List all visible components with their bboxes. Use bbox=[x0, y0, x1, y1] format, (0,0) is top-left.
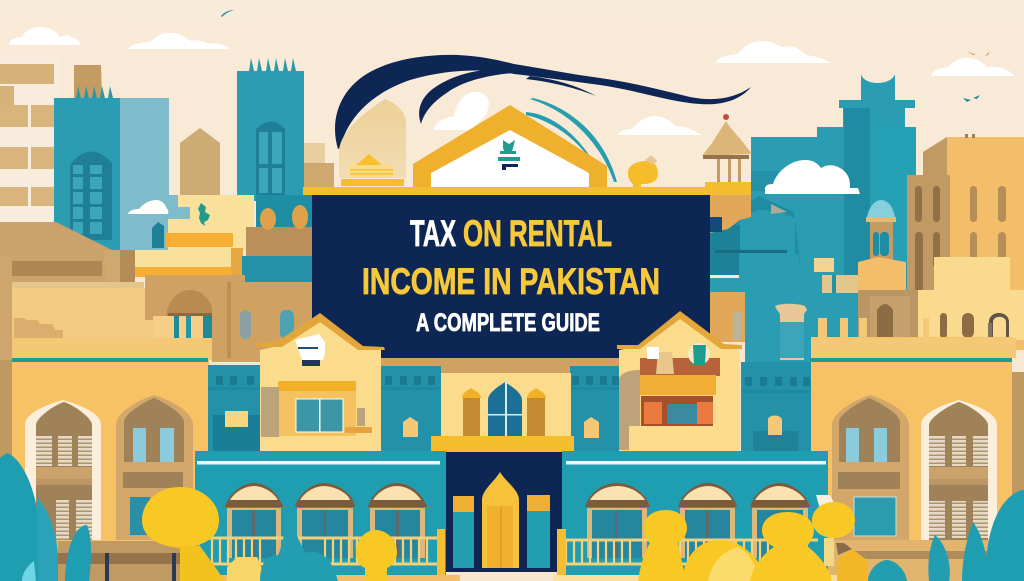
right teal skyline bbox=[710, 74, 916, 338]
gold cornice bbox=[303, 187, 720, 195]
center yellow tree bbox=[356, 530, 397, 581]
left mid terraces bbox=[0, 195, 312, 500]
left house bbox=[256, 313, 385, 451]
ground strip bbox=[58, 541, 853, 581]
center facade bbox=[431, 373, 574, 452]
small cloud behind roof bbox=[434, 92, 489, 130]
right yellow trees cluster bbox=[638, 495, 867, 581]
left main palace bbox=[12, 358, 209, 558]
domed pavilion on left of roof bbox=[339, 99, 406, 186]
navy swoosh bbox=[335, 55, 751, 149]
arcade windows bbox=[225, 483, 810, 558]
center teal bush bbox=[260, 523, 338, 581]
main roof gable with emblem bbox=[413, 105, 607, 188]
clouds and birds bbox=[9, 10, 1014, 135]
left yellow tree bbox=[142, 487, 267, 581]
navy central doorway bbox=[446, 452, 562, 572]
left teal shrubs bbox=[0, 453, 91, 581]
title line one accent: ON RENTAL bbox=[463, 213, 612, 254]
teal mid walls with battlements bbox=[208, 362, 811, 452]
title line one: TAX bbox=[410, 213, 456, 254]
right pavilion bbox=[702, 114, 752, 233]
lower teal arcades bbox=[195, 451, 828, 575]
left skyline buildings bbox=[0, 54, 334, 253]
balcony railings bbox=[205, 529, 818, 575]
right main palace bbox=[811, 318, 1024, 581]
yellow lamp and kiosk ornament bbox=[628, 155, 658, 190]
subtitle: A COMPLETE GUIDE bbox=[416, 309, 600, 337]
right sand buildings bbox=[858, 134, 1024, 350]
tan bands under panel bbox=[380, 292, 818, 373]
right house bbox=[617, 311, 742, 451]
title line two: INCOME IN PAKISTAN bbox=[362, 261, 660, 302]
right teal shrubs bbox=[868, 490, 1024, 581]
central navy panel bbox=[303, 187, 720, 359]
teal arcs behind roof bbox=[526, 98, 617, 182]
